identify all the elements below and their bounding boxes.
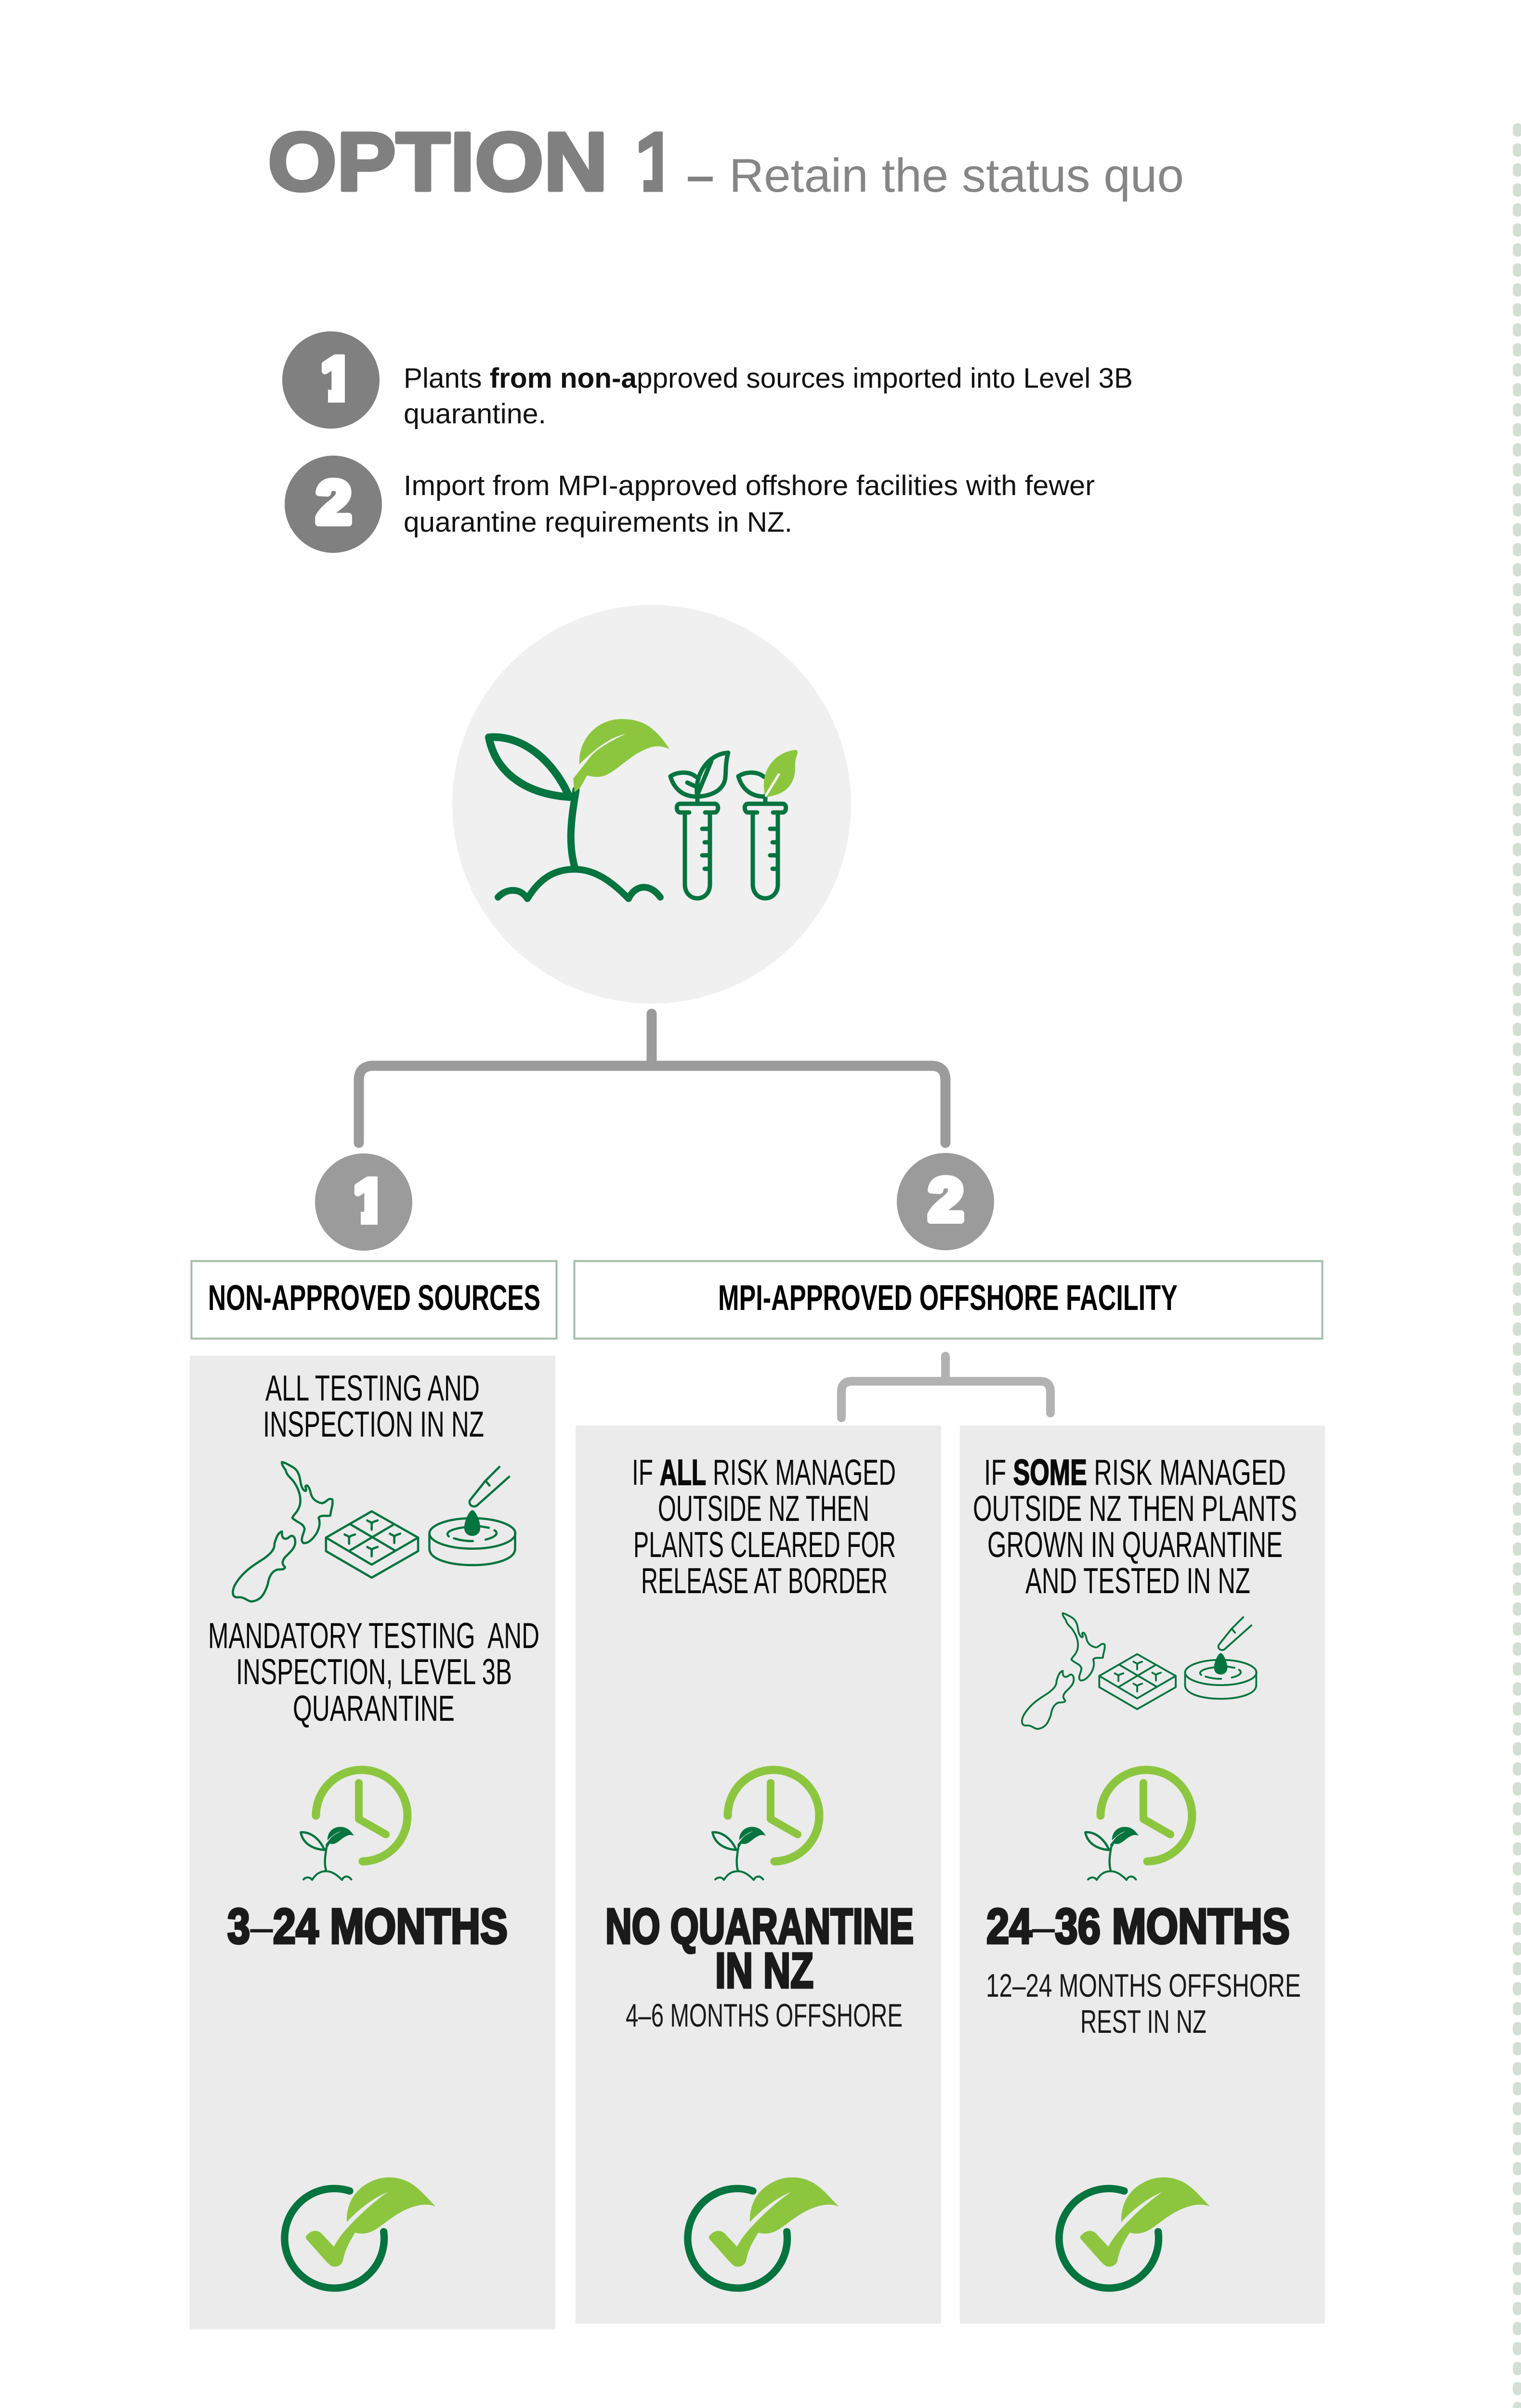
icon: pathway 1 badge: 1 — [354, 1167, 387, 1234]
text: non-approved sources: Plants from non-approved sources imported into Level 3B — [404, 363, 1133, 394]
text: all risk managed: IF ALL RISK MANAGED — [632, 1452, 896, 1492]
text: all risk managed — [632, 1452, 896, 1601]
icon: number 2 badge: 2 — [316, 469, 351, 536]
text: no quarantine — [605, 1898, 914, 2034]
text: MPI-approved facilities — [404, 470, 1095, 538]
text: no quarantine: IN NZ — [715, 1943, 813, 1998]
connector: offshore facility split — [841, 1356, 1050, 1418]
title: Retain the status quo — [729, 149, 1184, 202]
text: all risk managed: RELEASE AT BORDER — [641, 1560, 888, 1601]
text: MPI-approved facilities: Import from MPI-approved offshore facilities with fewer — [404, 470, 1095, 501]
title: OPTION — [268, 116, 608, 208]
icon: NZ map, tray and dish — [233, 1462, 515, 1601]
legend item 2 — [285, 456, 1095, 553]
icon: clock with seedling — [712, 1770, 819, 1880]
text: some risk managed — [973, 1452, 1297, 1601]
heading: non-approved sources: NON-APPROVED SOURCES — [208, 1278, 540, 1318]
panel: all risk managed outside NZ — [576, 1426, 941, 2324]
text: duration: 3–24 MONTHS — [227, 1898, 508, 1954]
text: mandatory testing: MANDATORY TESTING AND — [208, 1615, 539, 1656]
heading: MPI-approved offshore facility: MPI-APPROVED OFFSHORE FACILITY — [718, 1278, 1178, 1318]
text: some risk managed: GROWN IN QUARANTINE — [987, 1524, 1283, 1565]
text: all testing in NZ: INSPECTION IN NZ — [263, 1404, 484, 1444]
icon: leaf check — [688, 2177, 839, 2288]
dotted right edge strip — [1513, 128, 1521, 2408]
text: duration — [986, 1898, 1301, 2040]
panel: non-approved sources — [190, 1356, 555, 2329]
text: non-approved sources — [404, 363, 1133, 430]
text: MPI-approved facilities: quarantine requirements in NZ. — [404, 507, 792, 538]
text: no quarantine: NO QUARANTINE — [605, 1898, 914, 1954]
heading: non-approved sources — [192, 1261, 557, 1339]
text: duration: REST IN NZ — [1080, 2003, 1206, 2040]
text: all testing in NZ — [263, 1368, 484, 1444]
text: some risk managed: OUTSIDE NZ THEN PLANTS — [973, 1488, 1297, 1529]
text: all risk managed: PLANTS CLEARED FOR — [633, 1524, 896, 1565]
title: – — [686, 149, 714, 202]
heading: MPI-approved offshore facility — [574, 1261, 1323, 1339]
icon: pathway 2 badge: 2 — [929, 1166, 963, 1233]
text: non-approved sources: quarantine. — [404, 398, 546, 430]
connector: hero to the two pathways — [359, 1014, 945, 1143]
title — [270, 131, 1182, 201]
icon: pathway 2 badge — [897, 1153, 994, 1250]
icon: test tube with green leaf — [738, 750, 798, 898]
icon: NZ map, tray and dish — [1022, 1613, 1257, 1729]
panel: some risk managed outside NZ — [960, 1426, 1325, 2324]
icon: leaf check — [1059, 2177, 1210, 2288]
text: some risk managed: AND TESTED IN NZ — [1025, 1560, 1250, 1601]
icon: number 1 badge: 1 — [321, 345, 354, 412]
text: all testing in NZ: ALL TESTING AND — [265, 1368, 480, 1408]
icon: number 1 badge — [282, 331, 380, 429]
text: mandatory testing: INSPECTION, LEVEL 3B — [236, 1651, 512, 1692]
text: mandatory testing: QUARANTINE — [293, 1688, 455, 1728]
icon: seedling — [489, 719, 669, 899]
icon: test tube with outlined leaves — [670, 753, 728, 898]
icon: clock with seedling — [301, 1770, 407, 1880]
text: some risk managed: IF SOME RISK MANAGED — [984, 1452, 1286, 1492]
panel: plant and test tube hero — [452, 605, 851, 1004]
title: 1 — [635, 116, 681, 208]
icon: clock with seedling — [1085, 1770, 1192, 1880]
icon: pathway 1 badge — [315, 1153, 412, 1251]
icon: number 2 badge — [285, 456, 382, 553]
legend item 1 — [282, 331, 1133, 430]
text: all risk managed: OUTSIDE NZ THEN — [658, 1488, 869, 1529]
text: duration: 24–36 MONTHS — [986, 1898, 1290, 1954]
text: mandatory testing — [208, 1615, 539, 1728]
text: no quarantine: 4–6 MONTHS OFFSHORE — [626, 1997, 903, 2034]
text: duration: 12–24 MONTHS OFFSHORE — [986, 1967, 1301, 2004]
icon: leaf check — [285, 2177, 435, 2288]
